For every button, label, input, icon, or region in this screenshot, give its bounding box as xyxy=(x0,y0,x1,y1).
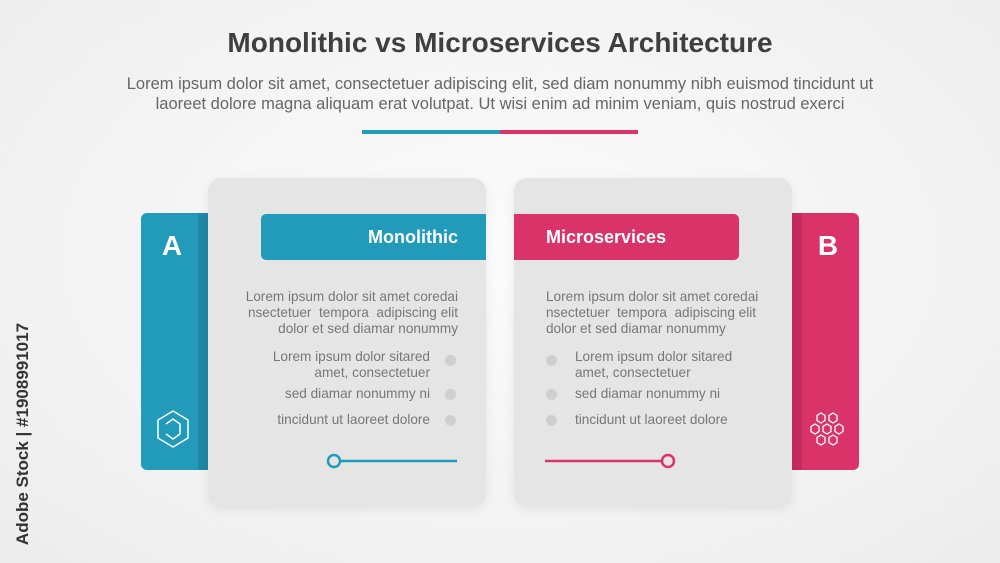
title: Monolithic vs Microservices Architecture xyxy=(227,27,773,58)
bullet list: tincidunt ut laoreet dolore xyxy=(575,412,728,427)
bullet list xyxy=(273,349,456,427)
bullet list: Lorem ipsum dolor sitared xyxy=(575,349,732,364)
panel: microservices xyxy=(514,178,792,506)
panel: monolithic xyxy=(208,178,486,506)
heading bar xyxy=(261,214,486,260)
text block: dolor et sed diamar nonummy xyxy=(278,321,458,336)
slider line xyxy=(326,454,457,468)
text block xyxy=(246,289,458,336)
slider line xyxy=(545,454,676,468)
bullet list: tincidunt ut laoreet dolore xyxy=(277,412,430,427)
text block: Lorem ipsum dolor sit amet coredai xyxy=(246,289,458,304)
subtitle xyxy=(127,75,874,113)
text block: Lorem ipsum dolor sit amet coredai xyxy=(546,289,758,304)
subtitle: Lorem ipsum dolor sit amet, consectetuer adipiscing elit, sed diam nonummy nibh euismod tincidunt ut xyxy=(127,75,873,93)
side credit text: Adobe Stock | #1908991017 xyxy=(13,323,32,545)
tab A xyxy=(141,213,211,470)
tab A: A xyxy=(162,230,182,261)
tab B: B xyxy=(818,230,838,261)
text block: nsectetuer tempora adipiscing elit xyxy=(546,305,756,320)
divider xyxy=(362,130,638,134)
subtitle: laoreet dolore magna aliquam erat volutpat. Ut wisi enim ad minim veniam, quis nostrud exerci xyxy=(156,95,844,113)
text block: dolor et sed diamar nonummy xyxy=(546,321,726,336)
bullet list: sed diamar nonummy ni xyxy=(285,386,430,401)
bullet list: amet, consectetuer xyxy=(314,365,430,380)
heading bar: Monolithic xyxy=(368,227,458,247)
bullet list: sed diamar nonummy ni xyxy=(575,386,720,401)
tab B xyxy=(789,213,859,470)
bullet list: Lorem ipsum dolor sitared xyxy=(273,349,430,364)
text block: nsectetuer tempora adipiscing elit xyxy=(248,305,458,320)
text block xyxy=(546,289,758,336)
icon: hexagon xyxy=(157,410,189,448)
bullet list: amet, consectetuer xyxy=(575,365,691,380)
heading bar xyxy=(514,214,739,260)
heading bar: Microservices xyxy=(546,227,666,247)
bullet list xyxy=(546,349,732,427)
icon: hexagon cluster xyxy=(810,412,844,446)
